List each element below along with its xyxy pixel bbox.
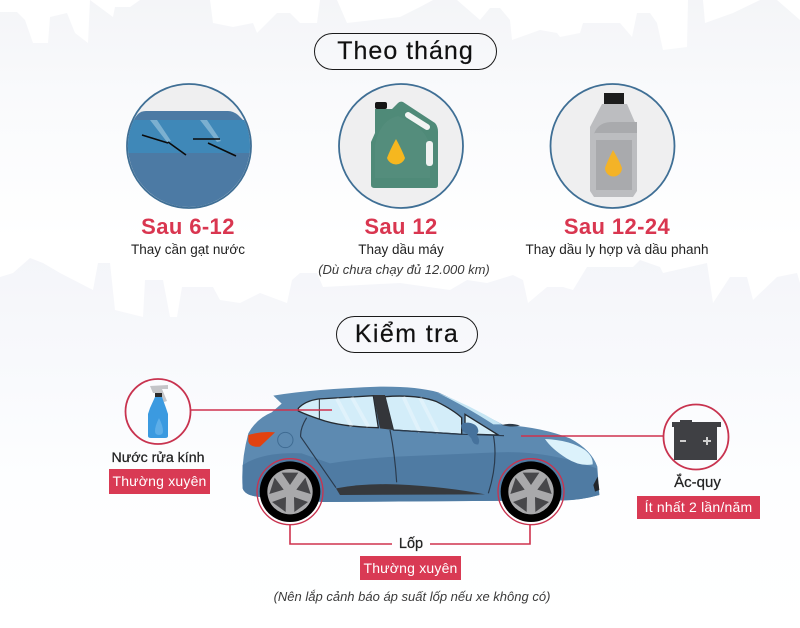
text: month 6-12 block: Thay cần gạt nước: [131, 242, 245, 257]
icon: battery: [662, 404, 730, 470]
car illustration: [242, 386, 600, 526]
text: month 12 block: (Dù chưa chạy đủ 12.000 km): [318, 262, 490, 277]
tag: tyre frequency: Thường xuyên: [363, 560, 458, 576]
icon: wiper circle: [126, 83, 252, 209]
note: tyre pressure warning: (Nên lắp cảnh báo áp suất lốp nếu xe không có): [274, 589, 550, 604]
heading: Kiểm tra: Kiểm tra: [355, 320, 459, 348]
text: month 6-12 block: Sau 6-12: [141, 214, 235, 239]
tag: tyre frequency: [360, 556, 461, 580]
tag: washer fluid frequency: [109, 469, 210, 494]
label: tyres: Lốp: [399, 536, 423, 552]
text: month 12 block: Thay dầu máy: [358, 242, 444, 257]
tag: washer fluid frequency: Thường xuyên: [112, 473, 207, 489]
icon: clutch and brake fluid bottle: [550, 83, 676, 209]
text: month 12-24 block: [526, 214, 708, 257]
text: month 12-24 block: Sau 12-24: [564, 214, 670, 239]
tag: battery frequency: [637, 496, 760, 519]
icon: washer fluid spray: [124, 378, 192, 445]
text: month 12-24 block: Thay dầu ly hợp và dầu phanh: [526, 242, 708, 257]
heading: Theo tháng: Theo tháng: [337, 37, 474, 65]
heading: Theo tháng: [314, 33, 497, 70]
icon: engine oil can: [338, 83, 464, 209]
text: month 6-12 block: [131, 214, 245, 257]
text: month 12 block: [318, 214, 490, 277]
text: month 12 block: Sau 12: [364, 214, 438, 239]
heading: Kiểm tra: [336, 316, 478, 353]
label: battery: Ắc-quy: [674, 474, 721, 491]
tag: battery frequency: Ít nhất 2 lần/năm: [645, 499, 752, 515]
label: washer fluid: Nước rửa kính: [112, 450, 204, 466]
